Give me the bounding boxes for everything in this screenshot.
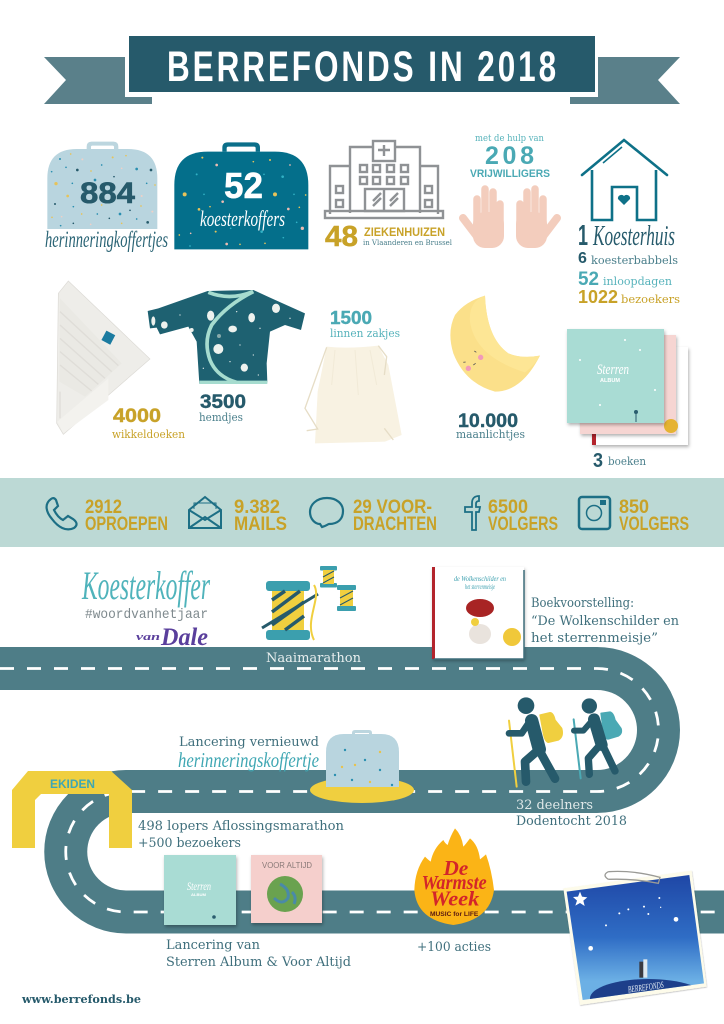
book: Sterren Album: ALBUM [191,892,207,897]
caption [166,938,351,970]
logo: flame [414,828,494,925]
event: ekiden [12,771,345,851]
inloopdagen: 52 [578,269,599,290]
item: hemdjes [148,290,305,424]
number: 52 [224,165,263,206]
logo: van Dale [136,624,208,651]
heading: 1 [578,220,588,252]
event: de warmste week [414,828,494,955]
caption [138,819,345,851]
book: front [567,329,664,423]
label: ZIEKENHUIZEN [364,225,445,239]
bezoekers: 1022 [578,287,618,307]
item: maanlichtjes [450,296,540,441]
caption [516,798,627,829]
book: Voor Altijd: VOOR ALTIJD [262,861,312,870]
item: boeken: Sterren [597,362,629,378]
intro text: met de hulp van [475,134,544,144]
stat: instagram followers: VOLGERS [619,514,689,535]
logo: van Dale: Dale [160,624,208,651]
yellow platform [310,777,414,803]
inloopdagen: inloopdagen [603,275,672,288]
icon: hospital [325,141,443,218]
book: middle [580,335,676,434]
event: koesterkoffer word of the year [81,563,210,651]
book: back [592,347,688,445]
caption [531,596,680,646]
stat: voordrachten: DRACHTEN [353,514,437,535]
caption: 32 deelners [516,798,593,813]
arch label: EKIDEN [50,777,95,791]
book: Sterren Album [164,855,236,925]
number: 3500 [200,392,246,413]
item: wikkeldoeken [57,281,185,441]
label: herinneringkoffertjes [45,227,168,252]
number: 4000 [113,406,161,427]
icon: hiker large [509,697,562,787]
koesterbabbels [578,250,678,267]
label [593,450,646,472]
stat: oproepen: OPROEPEN [85,514,168,535]
stat: oproepen: 2912 [85,497,122,518]
book: Sterren Album: Sterren [187,879,211,893]
number: 208 [485,142,535,170]
icon: phone [47,498,77,529]
event: boekvoorstelling [432,567,680,659]
logo text: De [442,858,468,880]
logo text: Week [430,887,480,911]
right ribbon [570,57,680,104]
stat: voordrachten [353,497,437,535]
stat: facebook followers [488,497,558,535]
icon: facebook [465,496,480,530]
sub label: in Vlaanderen en Brussel [363,238,453,247]
stat: vrijwilligers [463,134,557,248]
event: lancering herinneringskoffertje [178,730,414,803]
bezoekers: bezoekers [621,293,680,306]
stat: koesterhuis: Koesterhuis [592,221,675,252]
book cover: de Wolkenschilder en [454,575,506,583]
label: maanlichtjes [456,428,525,441]
label: VRIJWILLIGERS [470,168,550,180]
icon: envelope [189,497,221,528]
caption: +500 bezoekers [138,836,241,851]
stat: facebook followers: 6500 [488,497,528,518]
stat: facebook followers: VOLGERS [488,514,558,535]
logo text: Warmste [422,872,487,894]
stat: ziekenhuizen [325,141,453,253]
icon: large spool [262,581,318,640]
stat: voordrachten: 29 VOOR- [353,497,432,518]
caption: +100 acties [417,940,491,955]
stat: oproepen [85,497,168,535]
label: wikkeldoeken [112,428,185,441]
icon: hiker small [574,698,621,778]
hashtag: #woordvanhetjaar [85,607,208,623]
label: 3 [593,450,603,472]
event: dodentocht [509,697,627,829]
logo text: MUSIC for LIFE [430,911,479,918]
illustration: moon [450,296,540,392]
koesterbabbels: 6 [578,250,587,267]
number: 10.000 [458,411,518,432]
logo: van Dale: van [136,631,160,643]
icon: hands [463,189,557,248]
item: boeken: ALBUM [600,378,620,384]
stat: mails: MAILS [234,514,287,535]
label: linnen zakjes [330,327,400,340]
label: koesterkoffers [200,206,285,231]
icon: instagram [579,497,610,529]
caption: 498 lopers Aflossingsmarathon [138,819,345,834]
photo: shirt [148,290,305,384]
caption: “De Wolkenschilder en [531,614,680,629]
book: Voor Altijd [251,855,322,923]
title: BERREFONDS IN 2018 [167,43,559,91]
script caption: herinneringskoffertje [178,748,319,772]
item: linnen zakjes [305,308,402,443]
inloopdagen [578,269,672,290]
label: boeken [608,455,646,468]
label: Naaimarathon [266,651,362,666]
photo card: berrefonds: BERREFONDS [627,981,665,996]
timeline road [0,668,724,912]
stat: koesterkoffers [174,142,308,249]
stat: koesterhuis [578,140,680,307]
icon: speech bubble [310,498,343,527]
event: lancering boeken [164,855,351,970]
caption: Lancering van [166,938,261,953]
photo card: berrefonds [563,871,707,1018]
label: hemdjes [199,411,243,424]
number: 48 [325,221,358,253]
banner plate [129,36,595,92]
photo: cloth [57,281,150,434]
number: 884 [80,177,135,210]
bezoekers [578,287,680,307]
website: www.berrefonds.be [21,993,141,1006]
book cover: het sterrenmeisje [465,583,495,591]
caption: Boekvoorstelling: [531,596,634,611]
number: 1500 [330,308,372,328]
caption: het sterrenmeisje” [531,631,658,646]
script word: Koesterkoffer [81,563,210,608]
suitcase [352,730,372,735]
icon: small spool [337,585,356,611]
stat: instagram followers [619,497,689,535]
logo text [422,858,487,918]
title banner [44,36,680,104]
koesterbabbels: koesterbabbels [591,254,678,267]
caption: Lancering vernieuwd [179,735,319,750]
yellow arch [12,771,132,848]
safety pin [605,871,660,883]
stat: instagram followers: 850 [619,497,649,518]
icon: small spool [320,566,337,588]
caption: Sterren Album & Voor Altijd [166,955,351,970]
icon: house [582,140,667,220]
stat: mails [234,497,287,535]
book cover [432,567,524,659]
photo: bag [305,346,402,443]
stat: herinneringkoffertjes [45,142,168,252]
left ribbon [44,57,152,104]
item: boeken [567,329,688,472]
caption: Dodentocht 2018 [516,814,627,829]
stat: mails: 9.382 [234,497,280,518]
event: naaimarathon [262,566,362,666]
panel: contact statistics [0,478,724,547]
